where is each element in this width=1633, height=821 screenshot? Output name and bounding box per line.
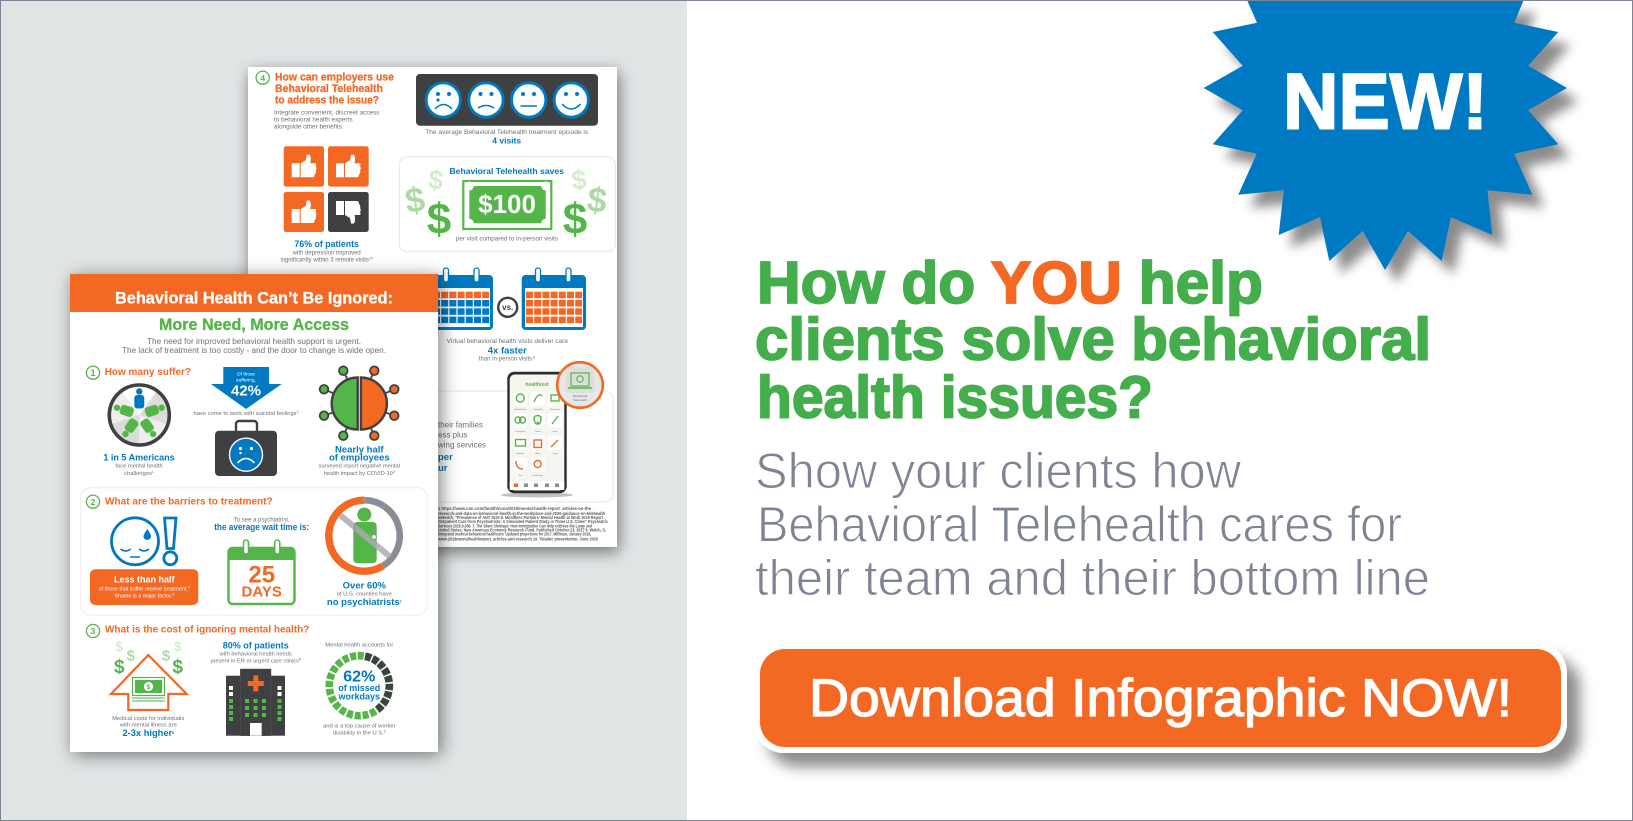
callout: less than half: Less than half (114, 575, 176, 585)
text: nearly half of employees (319, 445, 400, 477)
text: fragments hidden behind front sheet (437, 421, 486, 474)
text: medical costs 2-3x higher: Medical costs for individuals (112, 716, 184, 722)
intro text: The lack of treatment is too costly - and the door to change is wide open. (122, 345, 386, 355)
text: nearly half of employees: surveyed report negative mental (319, 464, 400, 470)
text: 80% of patients: 8 (299, 658, 301, 662)
icon: mood faces bar (416, 74, 598, 126)
icons: dollar signs: $ (426, 164, 445, 196)
text: over 60% of counties (327, 580, 402, 608)
callout: less than half: of those that suffer receive treatment. (99, 586, 188, 592)
heading: how can employers use behavioral telehealth: How can employers use (275, 72, 394, 84)
step 3 heading: What is the cost of ignoring mental health? (105, 624, 309, 636)
step 4 number badge: 4 (260, 73, 265, 83)
step 2 heading: What are the barriers to treatment? (105, 495, 273, 507)
icon: house arrow with money (111, 639, 187, 710)
icons: dollar signs: $ (585, 180, 609, 221)
step 1 heading: 1 (90, 368, 96, 378)
icon: dollar bill (463, 181, 551, 229)
text: 1 in 5 Americans: 1 (152, 470, 154, 474)
heading: how do you help clients (755, 250, 1431, 430)
step 1 heading: How many suffer? (105, 366, 191, 378)
text: integrate convenient access: alongside other benefits. (274, 124, 344, 130)
infographic page: back sheet (248, 67, 617, 547)
icon: house arrow with money: $ (147, 684, 151, 691)
heading: how do you help clients: How do YOU help (757, 250, 1263, 316)
icon: orange calendar (522, 268, 586, 330)
icon: house arrow with money: $ (172, 657, 183, 678)
header banner (70, 274, 438, 312)
text: subheading show your clients: their team and their bottom line (755, 550, 1430, 606)
step 2 heading: 2 (91, 497, 96, 507)
text: nearly half of employees: of employees (329, 453, 390, 464)
icon: smartphone app: Pet Savings (533, 474, 543, 477)
icon: thumbs grid (284, 146, 369, 232)
text: 80% of patients: with behavioral health needs (219, 651, 292, 657)
text: medical costs 2-3x higher: with mental illness are (119, 723, 177, 729)
panel: telehealth saves $100 (399, 157, 615, 252)
text: top cause of disability: disability in the U.S. (333, 730, 384, 736)
step 4 number badge (256, 71, 269, 84)
heading: how can employers use behavioral telehealth (275, 72, 394, 106)
icon: calendar 25 days: DAYS (242, 584, 282, 601)
text: fragments hidden behind front sheet: per (438, 452, 453, 463)
heading: how do you help clients: clients solve behavioral (755, 306, 1431, 372)
icon: smartphone app: Legal (553, 453, 558, 455)
text: average wait time (214, 518, 309, 532)
text: nearly half of employees: health impact by COVID-19 (324, 471, 393, 477)
panel: step 2 barriers (81, 488, 427, 615)
icon: smartphone app (501, 372, 573, 498)
icon: house arrow with money: $ (174, 639, 182, 654)
text: 4x faster: Virtual behavioral health visits deliver care (447, 338, 568, 345)
icon: smartphone app: Home (535, 453, 540, 455)
text: mental health accounts for: Mental health accounts for (325, 643, 393, 649)
text: over 60% of counties: of U.S. counties have (337, 591, 392, 597)
icon: dollar bill: $100 (478, 189, 536, 219)
icon: smartphone app: Vision (552, 431, 558, 433)
icon: blue down arrow 42%: suffering, (236, 378, 256, 384)
text: footnotes: Integrated medical-behavioral healthcare: Updated projections for 2017, Milliman, January 2018, (438, 532, 591, 536)
icon: house arrow with money: $ (162, 648, 171, 664)
text: subheading show your clients: Show your clients how (755, 443, 1242, 499)
button: download infographic: Download Infographic NOW! (809, 669, 1512, 728)
starburst badge: NEW!: NEW! (1283, 56, 1488, 146)
icon: sad briefcase (215, 421, 277, 476)
icon: blue calendar (429, 268, 493, 330)
text: footnotes: research-and-data-on-behavioral-health-in-the-workplace-and-2020-guidance-on-telehealth (438, 511, 605, 516)
heading: how do you help clients: health issues? (757, 364, 1153, 430)
icon: telehealth callout: Telehealth (573, 398, 587, 402)
callout: less than half: 4 (188, 585, 190, 589)
text: fragments hidden behind front sheet: ess plus (438, 431, 467, 440)
icon: telehealth callout: Behavioral (573, 394, 587, 398)
icon: smartphone app: Behavioral (551, 408, 560, 411)
button: download infographic (754, 643, 1567, 753)
intro text: The need for improved behavioral health support is urgent. (147, 336, 361, 346)
subtitle: More Need, More Access (159, 316, 349, 334)
icon: house arrow with money: $ (114, 657, 125, 678)
text: fragments hidden behind front sheet: their families (438, 421, 483, 430)
icons: dollar signs (403, 164, 609, 244)
icon: smartphone app: Mental Health (514, 408, 526, 411)
icon: smartphone app: healthiest (525, 382, 549, 388)
text: average treatment episode: 4 visits (492, 136, 521, 146)
icon: smartphone app: Discount (517, 452, 524, 455)
infographic page: front sheet (70, 274, 438, 752)
panel: telehealth saves $100: Behavioral Telehealth saves (449, 166, 564, 176)
icon: 1 in 5 pie of people (109, 385, 169, 445)
text: 1 in 5 Americans (103, 452, 175, 477)
text: 76% of patients: 10 (369, 257, 373, 261)
text: average wait time: To see a psychiatrist, (234, 518, 290, 524)
intro text (122, 336, 386, 355)
panel: app frame with divider (300, 391, 613, 502)
icon: blue down arrow 42% (211, 367, 282, 409)
icon: smartphone app: Prescription (515, 430, 525, 433)
callout: less than half (90, 569, 198, 605)
text: medical costs 2-3x higher: 2-3x higher (123, 728, 172, 738)
chart: 62% missed workdays ring: 62% (343, 669, 375, 686)
icon: virus half and half (320, 366, 399, 440)
text: 80% of patients: present in ER or urgent care clinics (210, 659, 299, 665)
text: 1 in 5 Americans: challenges (124, 471, 152, 477)
text: fragments hidden behind front sheet: ur (438, 463, 448, 474)
text: 4x faster (447, 338, 568, 363)
text: footnotes: 1 https://www.cnn.com/health/ncna/2019/mental-health-report_articles-on-the (438, 506, 592, 511)
callout: less than half: 5 (172, 593, 174, 597)
text: 4x faster: than in-person visits (479, 357, 532, 363)
icons: dollar signs: $ (570, 164, 588, 196)
text: top cause of disability (323, 724, 396, 736)
text: 1 in 5 Americans: face mental health (115, 464, 163, 470)
text: footnotes: Outpatient Care from Psychiatrists: A Simulated Patient Study in Three U.S. Cities" Psychiatric (438, 519, 609, 524)
text: come to work with suicidal feelings: have come to work with suicidal feelings (193, 411, 297, 417)
icon: sweating face with exclamation (112, 518, 177, 565)
icons: dollar signs: $ (563, 195, 587, 244)
text: come to work with suicidal feelings: 2 (297, 410, 299, 414)
icon: smartphone app: Pet (519, 474, 522, 477)
text: 76% of patients: with depression improved (292, 251, 361, 257)
starburst badge: NEW! (1204, 0, 1567, 270)
icons: dollar signs: $ (403, 180, 427, 221)
text: 4x faster: 11 (532, 356, 536, 360)
icon: vs badge (498, 298, 517, 317)
text: over 60% of counties: no psychiatrists (327, 597, 400, 608)
icon: vs badge: vs. (502, 303, 513, 312)
chart: 62% missed workdays ring (324, 651, 394, 721)
text: fragments hidden behind front sheet: wing services (437, 441, 486, 450)
text: 76% of patients: significantly within 3 remote visits (281, 258, 369, 264)
text: over 60% of counties: 7 (400, 600, 402, 604)
icon: smartphone app: Telehealth (533, 408, 542, 411)
callout: less than half: Shame is a major factor. (114, 594, 172, 600)
icons: dollar signs: $ (427, 195, 451, 244)
text: integrate convenient access: to behavioral health experts (274, 116, 353, 124)
text: top cause of disability: and is a top cause of worker (323, 724, 396, 730)
text: medical costs 2-3x higher: 8 (172, 731, 174, 735)
icon: blue down arrow 42%: Of those (237, 372, 255, 378)
icon: house arrow with money: $ (127, 648, 136, 664)
text: nearly half of employees: Nearly half (335, 445, 384, 456)
text: integrate convenient access: Integrate convenient, discreet access (274, 110, 380, 117)
text: footnotes: mHealth, "Prevalence of ANY 2020 8. Mindfless Partners' Mental Health at Work 2019 Report (438, 515, 604, 520)
heading: how can employers use behavioral telehealth: to address the issue? (275, 94, 379, 106)
text: average treatment episode (425, 129, 589, 146)
text: footnotes: United States. New American Economy Research Fund, Published October 23, 2017 8. Welch, S, (438, 528, 606, 533)
chart: 62% missed workdays ring: workdays (338, 691, 380, 701)
panel: telehealth saves $100: per visit compared to in-person visits (456, 236, 558, 243)
text: 4x faster: 4x faster (488, 345, 527, 356)
icon: hospital (226, 669, 285, 736)
header banner: Behavioral Health Can’t Be Ignored: (115, 289, 393, 307)
icon: blue down arrow 42%: 42% (231, 383, 261, 400)
text: subheading show your clients: Behavioral Telehealth cares for (757, 497, 1402, 553)
panel: grey left background (0, 0, 687, 821)
heading: how can employers use behavioral telehealth: Behavioral Telehealth (275, 83, 383, 95)
icon: telehealth callout (557, 362, 603, 408)
text: footnotes: Services 2016;0.008. 7. The Silent Shortage: How Immigration Can Help Address the Large and (438, 524, 592, 529)
text: footnotes (437, 506, 609, 542)
icon: smartphone app: Dental (535, 430, 541, 433)
text: 80% of patients: 80% of patients (223, 640, 289, 650)
icon: house arrow with money: $ (116, 639, 124, 654)
text: subheading show your clients (755, 443, 1430, 606)
text: average wait time: the average wait time is: (214, 522, 309, 532)
icon: doctor with prohibition ring (329, 500, 400, 571)
text: over 60% of counties: Over 60% (343, 580, 387, 591)
text: 76% of patients: 76% of patients (294, 239, 359, 249)
text: 80% of patients (210, 640, 301, 665)
icon: calendar 25 days: 25 (248, 561, 275, 588)
text: nearly half of employees: 3 (393, 470, 395, 474)
text: top cause of disability: 9 (384, 729, 386, 733)
text: medical costs 2-3x higher (112, 716, 184, 738)
text: footnotes: www.2019mentalhealthreport_articles-and-research 10. Teladoc presentation, June 2020 (437, 537, 599, 542)
text: integrate convenient access (274, 110, 380, 130)
chart: 62% missed workdays ring: of missed (338, 683, 380, 693)
step 3 heading: 3 (91, 626, 96, 636)
text: 1 in 5 Americans: 1 in 5 Americans (103, 452, 175, 462)
text: 76% of patients (281, 239, 373, 264)
text: average treatment episode: The average Behavioral Telehealth treatment episode is (425, 129, 589, 136)
icon: calendar 25 days (228, 540, 295, 604)
